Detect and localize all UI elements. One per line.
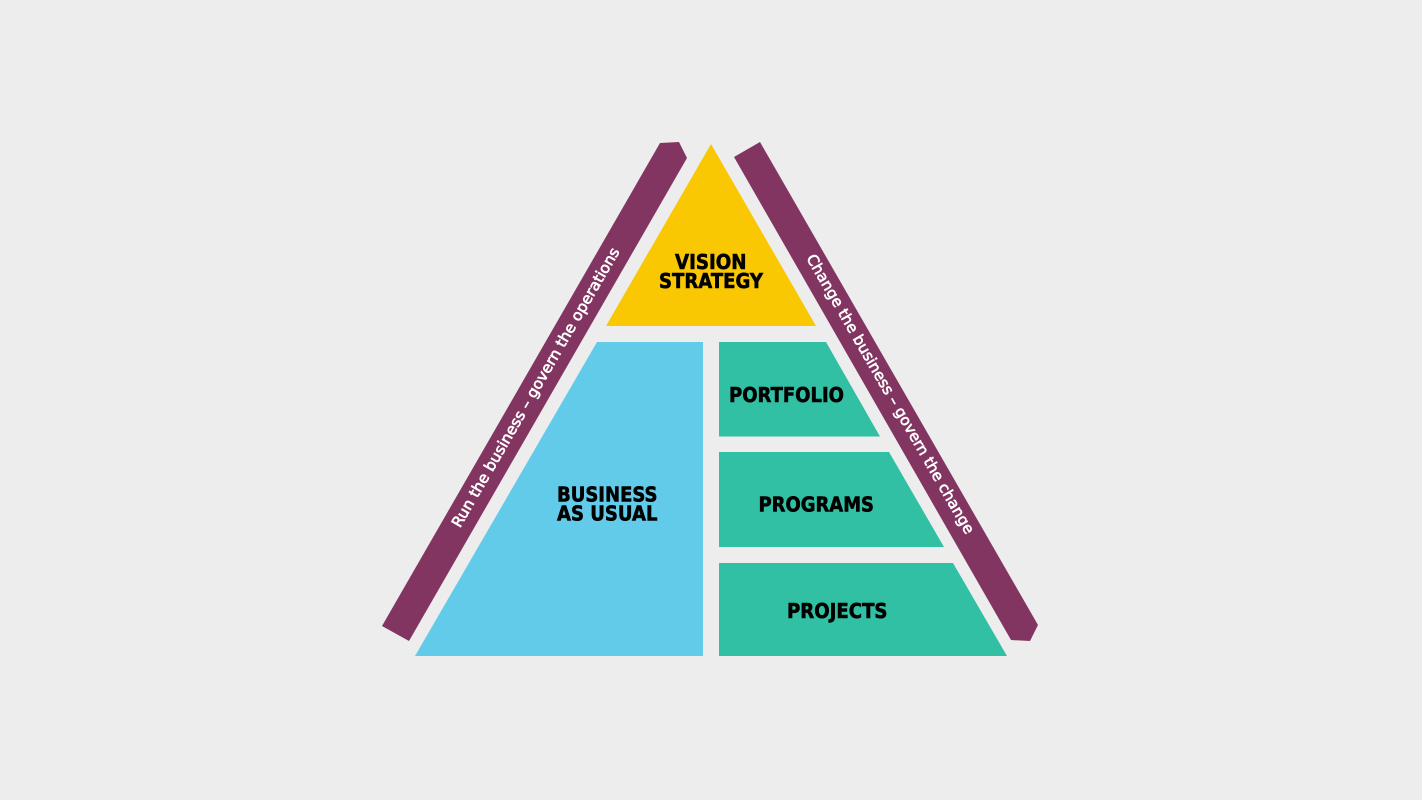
heading: business: BUSINESS xyxy=(557,482,658,506)
panel: portfolio xyxy=(719,342,880,436)
panel: programs xyxy=(719,452,944,547)
heading: vision: VISION xyxy=(675,250,746,274)
left band text: Run the business – govern the operations xyxy=(448,244,624,530)
panel: business as usual xyxy=(415,342,703,656)
panel: vision and strategy xyxy=(606,144,816,326)
right band text: Change the business – govern the change xyxy=(803,251,978,537)
right band: change the business xyxy=(734,142,1038,641)
heading: as usual: AS USUAL xyxy=(557,502,658,526)
panel: projects xyxy=(719,563,1007,656)
heading: programs: PROGRAMS xyxy=(758,492,874,516)
heading: projects: PROJECTS xyxy=(787,599,888,623)
heading: portfolio: PORTFOLIO xyxy=(729,383,844,407)
left band: run the business xyxy=(382,142,687,641)
heading: strategy: STRATEGY xyxy=(659,269,764,293)
